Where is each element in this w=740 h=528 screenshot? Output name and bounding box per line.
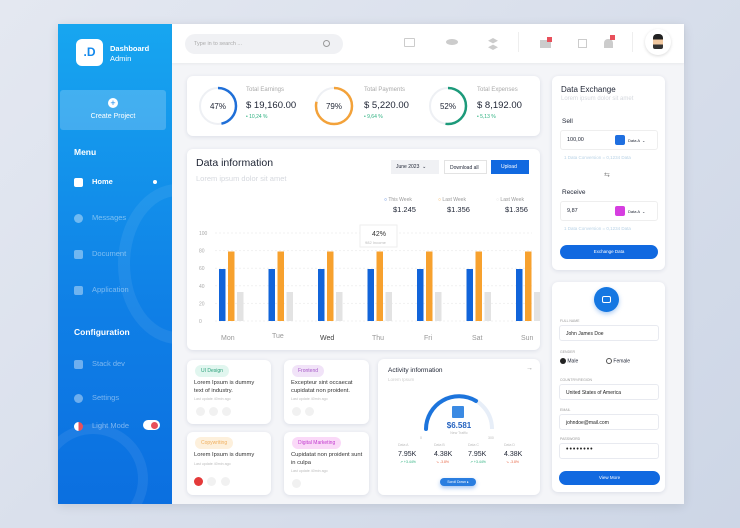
- stats card: $ 8,192.00: [477, 100, 522, 111]
- task card: UI Design: Last update 40min ago: [194, 397, 231, 401]
- menu heading: Menu: [74, 147, 96, 157]
- data columns: 7.95K: [468, 451, 486, 458]
- task card: Digital Marketing: Last update 40min ago: [291, 469, 328, 473]
- bar chart: 80: [199, 249, 205, 255]
- data exchange card: 100,00: [567, 137, 584, 143]
- menu items: Home: [92, 177, 113, 186]
- legend: ○ Last Week: [496, 197, 524, 203]
- controls: June 2023 ⌄: [396, 164, 426, 170]
- task card: Frontend: cupidatat non proident.: [291, 388, 350, 394]
- task card: Copywriting: Copywriting: [201, 440, 227, 446]
- gauge: [420, 394, 494, 440]
- search: Type in to search ...: [194, 41, 242, 47]
- stats card: • 5,13 %: [477, 114, 496, 120]
- data exchange card: Data A ⌄: [628, 209, 645, 214]
- bar chart: Thu: [372, 335, 384, 342]
- bar chart: Tue: [272, 333, 284, 340]
- stats card: Total Payments: [364, 87, 405, 93]
- logo: Dashboard: [110, 44, 149, 53]
- profile form card: EMAIL: [560, 408, 571, 412]
- task card: Frontend: Excepteur sint occaecat: [291, 380, 353, 386]
- legend: ○ Last Week: [438, 197, 466, 203]
- data columns: 4.38K: [504, 451, 522, 458]
- activity information card: [378, 359, 540, 495]
- data exchange card: Sell: [562, 118, 573, 125]
- top icons: [404, 32, 633, 52]
- logo: .D: [84, 45, 96, 59]
- stats card: $ 19,160.00: [246, 100, 296, 111]
- create project button: Create Project: [91, 113, 135, 120]
- config items: [74, 359, 160, 431]
- stats card: • 10,24 %: [246, 114, 268, 120]
- legend: $1.356: [447, 205, 470, 214]
- profile form card: Female: [613, 358, 630, 364]
- stats card: 79%: [326, 102, 342, 111]
- sidebar: [58, 24, 172, 504]
- profile form card: [552, 282, 665, 492]
- config items: Light Mode: [92, 421, 129, 430]
- scroll down button: Scroll Down ▸: [447, 480, 469, 484]
- task card: Copywriting: [187, 432, 271, 495]
- controls: [391, 160, 529, 174]
- data exchange card: Exchange Data: [594, 249, 624, 254]
- stats card: [187, 76, 540, 136]
- activity information card: New Traffic: [450, 431, 468, 435]
- controls: Download all: [450, 165, 479, 171]
- menu items: Messages: [92, 213, 126, 222]
- data information card: [187, 149, 540, 350]
- stats card: 52%: [440, 102, 456, 111]
- legend: [384, 197, 528, 214]
- main frame: [58, 24, 684, 504]
- bar chart: 40: [199, 284, 205, 290]
- bar chart: Fri: [424, 335, 433, 342]
- scroll down button: [440, 478, 476, 486]
- data exchange card: Data Exchange: [561, 85, 616, 94]
- data columns: [398, 443, 522, 464]
- task card: Copywriting: Last update 40min ago: [194, 462, 231, 466]
- stats card: $ 5,220.00: [364, 100, 409, 111]
- data exchange card: ⇆: [604, 172, 610, 179]
- data columns: 4.38K: [434, 451, 452, 458]
- profile form card: John James Doe: [566, 331, 604, 337]
- bar chart: 60: [199, 266, 205, 272]
- profile form card: johndoe@mail.com: [566, 420, 609, 426]
- task card: Digital Marketing: Digital Marketing: [298, 440, 335, 446]
- profile form card: FULL NAME: [560, 319, 580, 323]
- bar chart: 42%: [372, 231, 386, 238]
- data columns: Data C: [468, 443, 479, 447]
- gauge: 0: [420, 436, 422, 440]
- activity information card: →: [526, 365, 533, 372]
- top bar: [172, 24, 684, 63]
- create project button: +: [110, 98, 116, 108]
- profile form card: United States of America: [566, 390, 621, 396]
- profile form card: ••••••••: [566, 446, 594, 453]
- logo: Admin: [110, 54, 131, 63]
- data columns: Data B: [434, 443, 445, 447]
- profile form card: GENDER: [560, 350, 575, 354]
- data exchange card: Data A ⌄: [628, 138, 645, 143]
- search: [185, 34, 343, 54]
- task card: Frontend: Frontend: [298, 368, 318, 374]
- task card: UI Design: Lorem Ipsum is dummy: [194, 380, 254, 386]
- bar chart: 0: [199, 319, 202, 325]
- stats card: • 9,64 %: [364, 114, 383, 120]
- data exchange card: Lorem ipsum dolor sit amet: [561, 96, 633, 102]
- data columns: Data A: [398, 443, 409, 447]
- menu items: [74, 177, 157, 295]
- task card: Digital Marketing: [284, 432, 369, 495]
- task card: UI Design: [187, 360, 271, 424]
- task card: Digital Marketing: Cupidatat non proident sunt: [291, 452, 362, 458]
- activity information card: Activity information: [388, 367, 443, 374]
- bar chart: 100: [199, 231, 208, 237]
- logo: [76, 39, 149, 66]
- task card: Digital Marketing: in culpa: [291, 460, 311, 466]
- task card: Frontend: Last update 40min ago: [291, 397, 328, 401]
- profile form card: PASSWORD: [560, 437, 580, 441]
- data exchange card: 1 Data Conversion = 0,1234 Data: [564, 155, 631, 160]
- data exchange card: [552, 76, 665, 270]
- data exchange card: 9,87: [567, 208, 578, 214]
- activity information card: Lorem Ipsum: [388, 377, 414, 382]
- bar chart: 982 Income: [365, 240, 387, 245]
- configuration heading: Configuration: [74, 327, 130, 337]
- stats card: Total Expenses: [477, 87, 518, 93]
- data columns: ↗ +3.44%: [400, 460, 416, 464]
- data columns: ↗ +3.44%: [470, 460, 486, 464]
- profile form card: View More: [599, 475, 620, 480]
- bar chart: Mon: [221, 335, 235, 342]
- bar chart: 20: [199, 301, 205, 307]
- menu items: Application: [92, 285, 129, 294]
- activity information card: $6.581: [447, 421, 471, 430]
- menu items: Document: [92, 249, 126, 258]
- data columns: ↘ -3.8%: [506, 460, 519, 464]
- avatar: [645, 29, 671, 55]
- data columns: ↘ -3.8%: [436, 460, 449, 464]
- data columns: Data D: [504, 443, 515, 447]
- bar chart: Wed: [320, 335, 334, 342]
- bar chart: [199, 224, 540, 342]
- create project button: [60, 90, 166, 130]
- legend: ○ This Week: [384, 197, 412, 203]
- bar chart: Sun: [521, 335, 534, 342]
- gauge: 300: [488, 436, 494, 440]
- stats card: 47%: [210, 102, 226, 111]
- stats card: Total Earnings: [246, 87, 284, 93]
- task card: UI Design: text of industry.: [194, 388, 233, 394]
- config items: Stack dev: [92, 359, 125, 368]
- bar chart: Sat: [472, 335, 483, 342]
- config items: Settings: [92, 393, 119, 402]
- data exchange card: 1 Data Conversion = 0,1234 Data: [564, 226, 631, 231]
- data columns: 7.95K: [398, 451, 416, 458]
- data information card: Data information: [196, 157, 273, 169]
- task card: Frontend: [284, 360, 369, 424]
- legend: $1.245: [393, 205, 416, 214]
- task card: Copywriting: Lorem Ipsum is dummy: [194, 452, 254, 458]
- task card: UI Design: UI Design: [201, 368, 223, 374]
- profile form card: Male: [567, 358, 578, 364]
- data exchange card: Receive: [562, 189, 585, 196]
- controls: Upload: [501, 164, 517, 170]
- profile form card: COUNTRY/REGION: [560, 378, 592, 382]
- data information card: Lorem ipsum dolor sit amet: [196, 174, 286, 183]
- legend: $1.356: [505, 205, 528, 214]
